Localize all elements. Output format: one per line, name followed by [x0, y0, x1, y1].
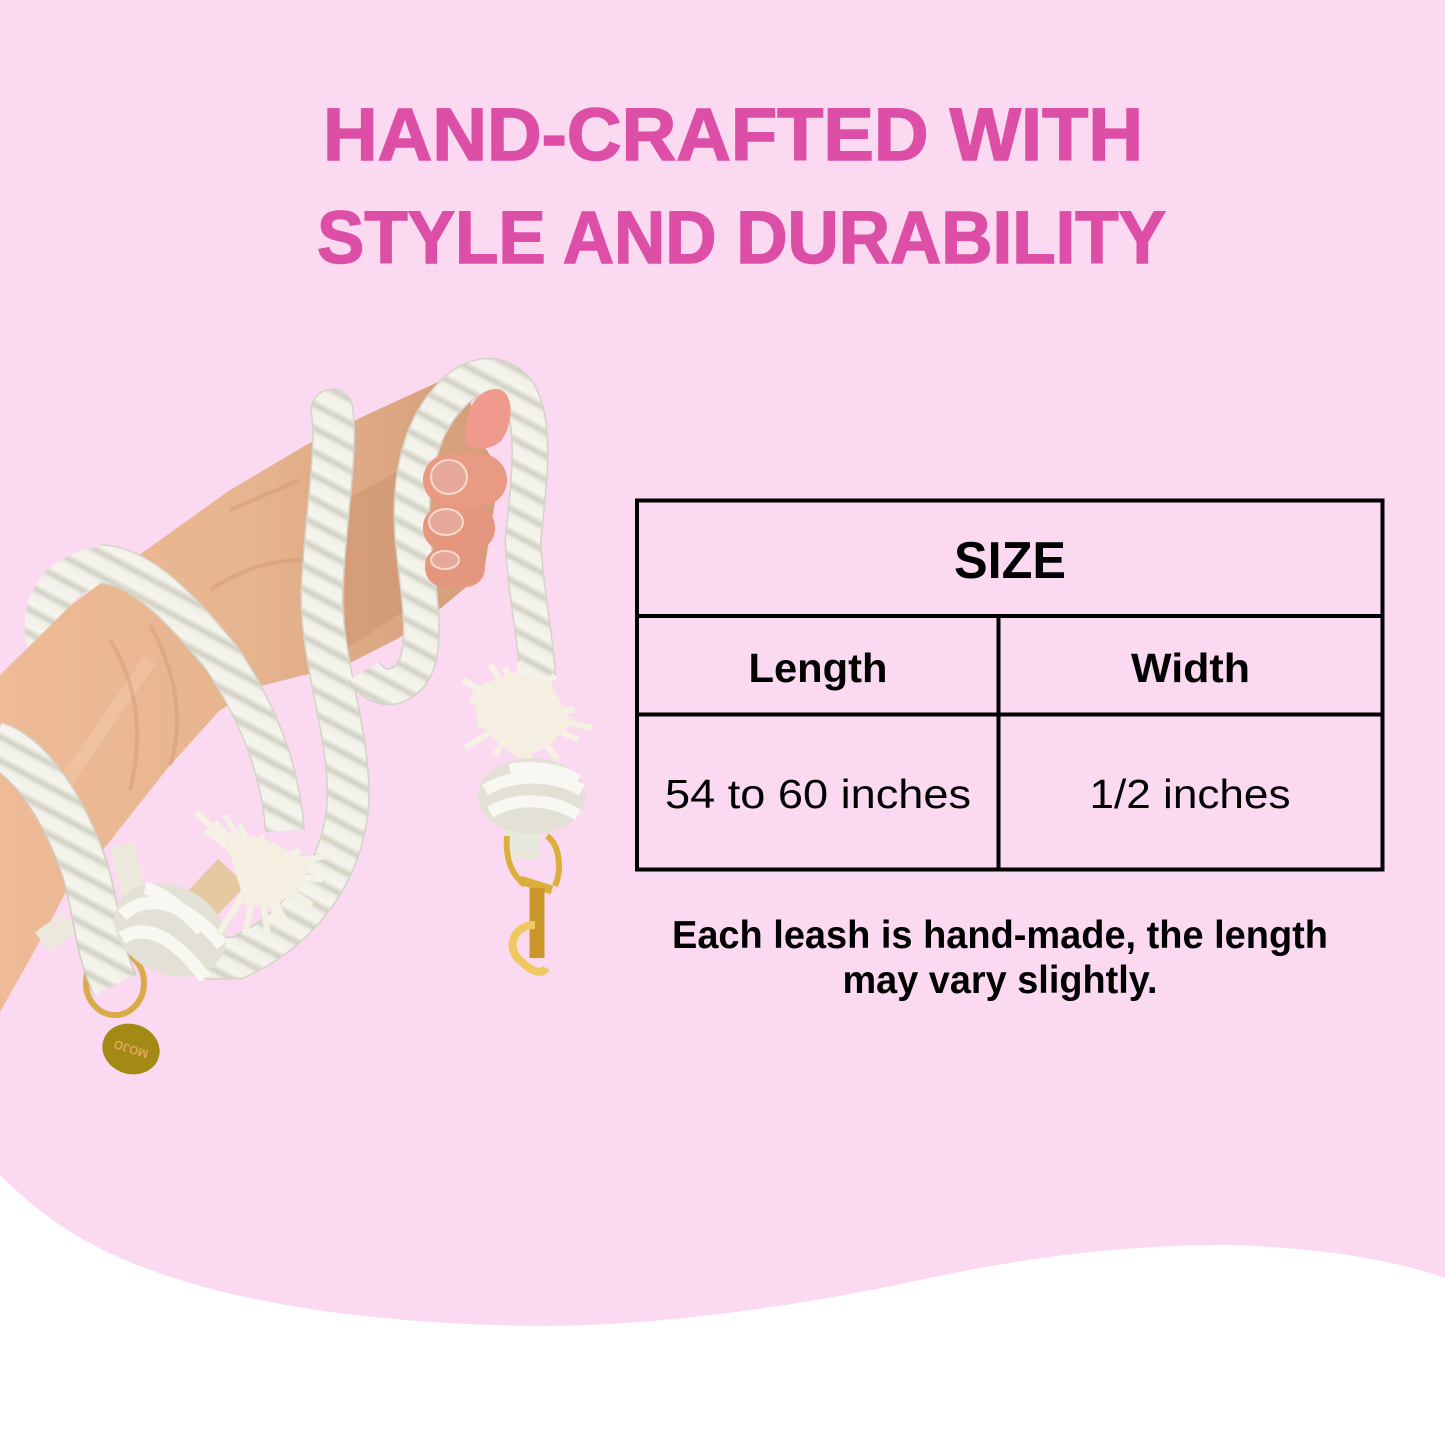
rope behind wrist [42, 845, 134, 942]
gold ring [86, 951, 144, 1015]
gold tag [96, 1016, 166, 1082]
table grid [637, 500, 1382, 870]
wrist highlight band [60, 660, 150, 790]
fingers [423, 389, 511, 587]
title [317, 93, 1166, 279]
table heading: SIZE [954, 532, 1066, 590]
hand and arm [0, 378, 500, 1012]
photo: hand holding rope leash [0, 376, 593, 1082]
size table [637, 500, 1382, 870]
rope: back of wrist loop [45, 566, 108, 655]
brass snap clasp [507, 836, 559, 972]
rope: front wrist wrap [0, 745, 115, 985]
rope: strand held by fingers [364, 376, 538, 687]
column: length: Length [748, 645, 888, 691]
left fringe [196, 812, 330, 935]
wrist creases [110, 480, 305, 790]
gold tag: MOJO [112, 1037, 150, 1061]
left knot and wrap [99, 866, 241, 994]
rope: loop around wrist [100, 564, 285, 831]
rope: long strand through palm [210, 410, 348, 958]
right knot [478, 758, 586, 860]
length value: 54 to 60 inches [665, 771, 971, 817]
note text [672, 914, 1328, 1002]
width value: 1/2 inches [1090, 771, 1290, 817]
title: STYLE AND DURABILITY [317, 196, 1166, 279]
column: width: Width [1131, 645, 1250, 691]
right fringe [463, 662, 593, 768]
note text: Each leash is hand-made, the length [672, 914, 1328, 957]
title: HAND-CRAFTED WITH [323, 93, 1143, 176]
palm shadow [345, 470, 420, 650]
note text: may vary slightly. [842, 959, 1158, 1002]
